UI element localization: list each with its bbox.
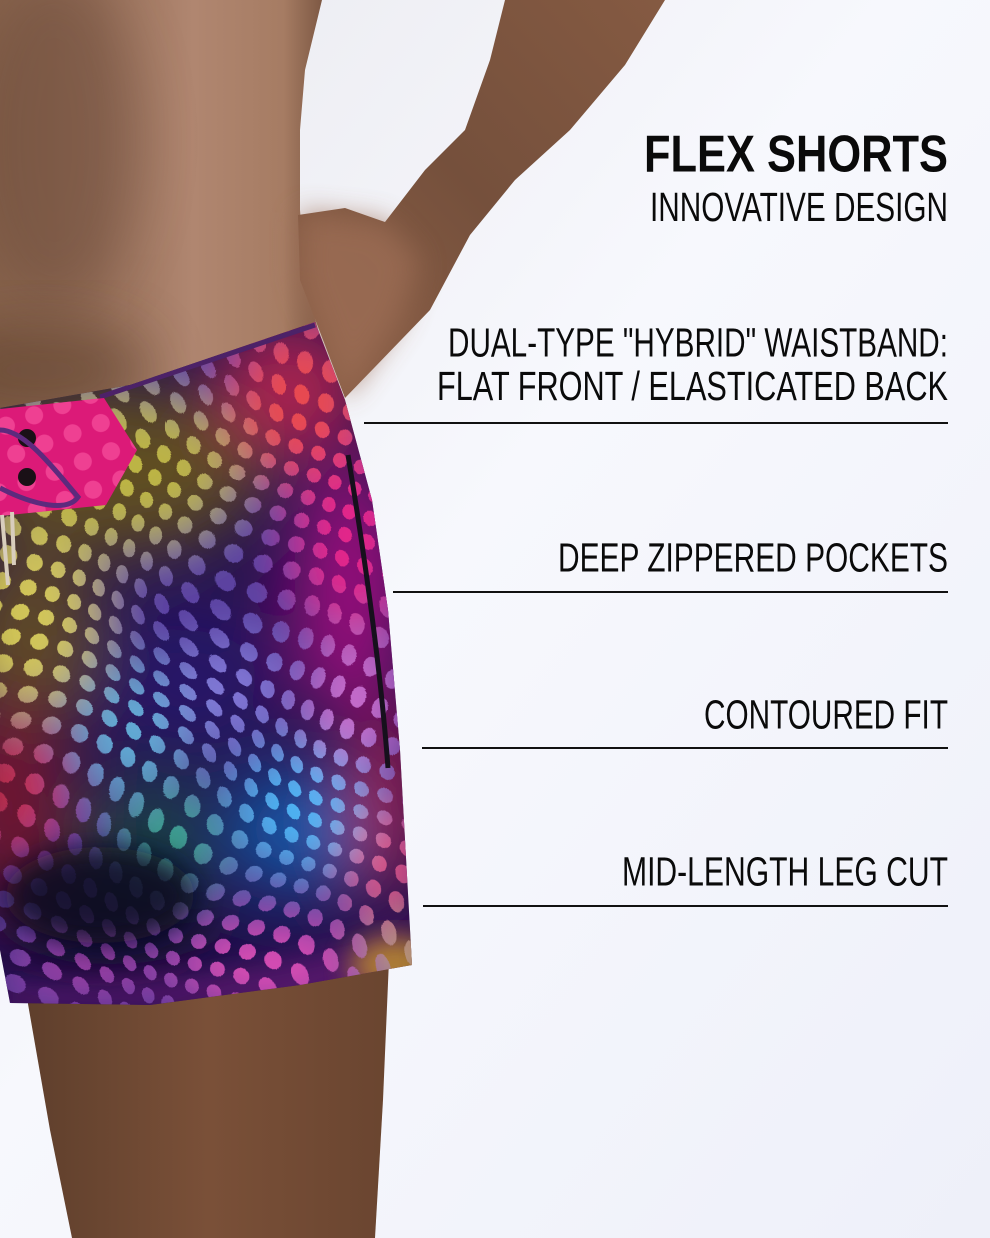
patterned shorts: [0, 322, 412, 1005]
coloured dots: [0, 322, 412, 1005]
arm and hand: [298, 0, 665, 398]
shadow fold: [5, 847, 195, 943]
base colour: [0, 320, 415, 965]
photo: model wearing shorts: [0, 0, 665, 1238]
zipper pocket: [348, 455, 388, 768]
feature: waistband: [364, 320, 948, 424]
waistband trim: [100, 325, 315, 397]
leg: [28, 960, 389, 1238]
torso: [0, 0, 322, 420]
waistband tab: [0, 398, 137, 585]
